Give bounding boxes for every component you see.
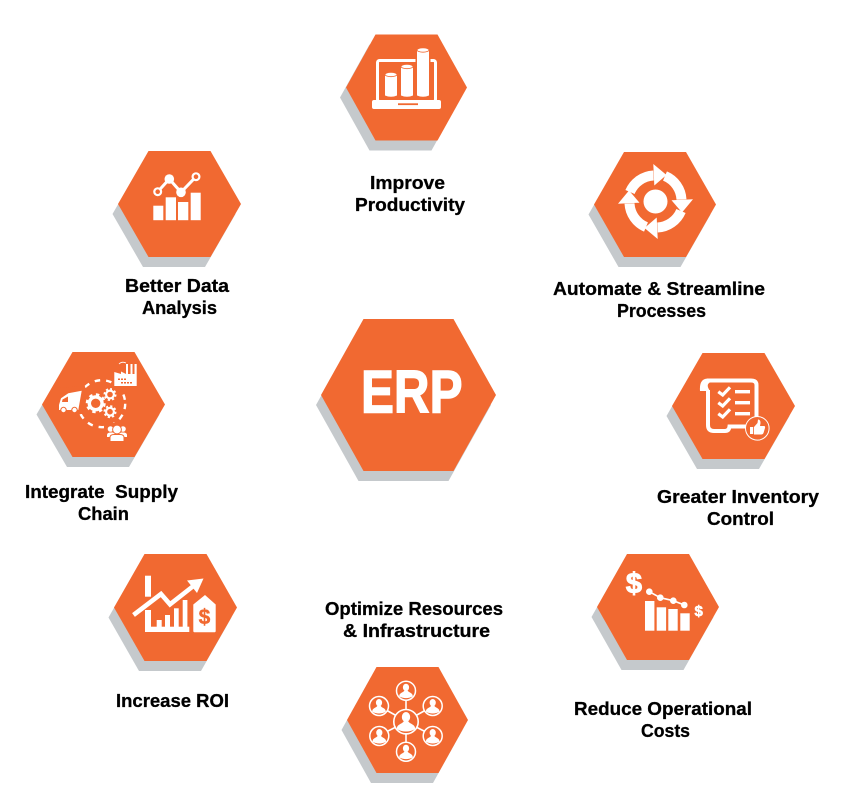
icon: falling costs chart <box>626 568 704 631</box>
hexagon <box>672 353 795 459</box>
label <box>125 275 230 318</box>
icon: bars and line chart <box>153 173 201 220</box>
panel: reduce operational costs <box>574 554 752 741</box>
hexagon <box>597 554 719 660</box>
icon: falling costs chart: $ <box>695 603 704 620</box>
icon: checklist scroll with thumb <box>700 378 769 440</box>
hexagon shadow <box>340 44 461 150</box>
hexagon <box>114 554 237 661</box>
panel: greater inventory control <box>657 353 820 529</box>
icon: circular process arrows <box>618 164 693 239</box>
hexagon shadow <box>316 329 491 481</box>
label: Increase ROI <box>116 690 229 711</box>
panel: automate and streamline <box>553 152 765 321</box>
panel: improve productivity <box>340 34 467 215</box>
label: Costs <box>641 720 690 741</box>
label: Improve <box>370 172 445 193</box>
label: & Infrastructure <box>343 620 490 641</box>
icon: rising arrow, factory and price tag <box>134 576 216 632</box>
hexagon shadow <box>36 362 160 467</box>
icon: laptop with cylinder bars <box>372 46 441 109</box>
label: Automate & Streamline <box>553 278 765 299</box>
icon: supply chain cycle <box>56 362 139 443</box>
label <box>553 278 765 321</box>
hexagon shadow <box>112 161 236 267</box>
hexagon shadow <box>108 564 232 671</box>
hexagon shadow <box>666 363 790 469</box>
hexagon <box>347 667 468 773</box>
hexagon <box>42 352 165 457</box>
hexagon <box>118 151 241 257</box>
panel: better data analysis <box>112 151 241 318</box>
hexagon shadow <box>592 564 714 670</box>
heading: ERP: ERP <box>361 357 462 425</box>
label: Productivity <box>355 194 466 215</box>
label: Greater Inventory <box>657 486 820 507</box>
label: Better Data <box>125 275 230 296</box>
panel: ERP centre <box>316 319 496 481</box>
label <box>574 698 752 741</box>
label <box>355 172 466 215</box>
icon: rising arrow, factory and price tag: $ <box>199 606 211 629</box>
panel: optimize resources <box>325 598 503 783</box>
label <box>657 486 820 529</box>
label: Processes <box>617 300 706 321</box>
label: Reduce Operational <box>574 698 752 719</box>
label: Analysis <box>142 297 217 318</box>
hexagon <box>346 34 467 140</box>
label: Chain <box>78 503 129 524</box>
label: Integrate Supply <box>25 481 179 502</box>
hexagon shadow <box>342 677 462 783</box>
label: Optimize Resources <box>325 598 503 619</box>
panel: integrate supply chain <box>25 352 179 524</box>
label: Control <box>707 508 774 529</box>
label <box>325 598 503 641</box>
icon: falling costs chart: $ <box>626 568 642 600</box>
panel: increase ROI <box>108 554 237 711</box>
hexagon shadow <box>588 162 710 267</box>
hexagon <box>594 152 716 257</box>
label <box>25 481 179 524</box>
hexagon <box>321 319 496 471</box>
icon: people network <box>370 681 442 761</box>
